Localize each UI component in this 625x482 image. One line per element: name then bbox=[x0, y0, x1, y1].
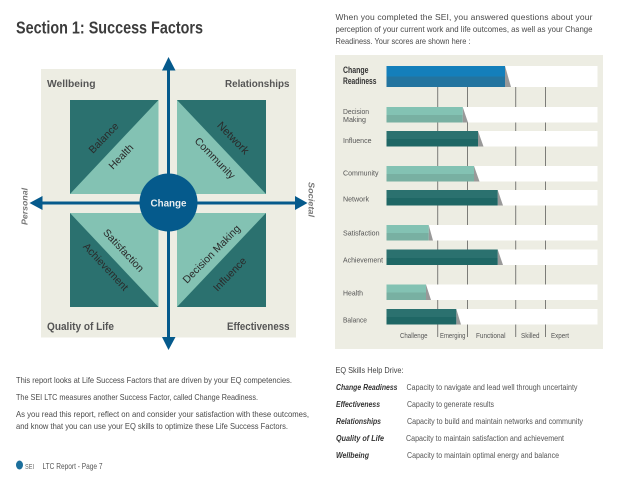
text block: SEI explanation bbox=[336, 12, 593, 46]
chart axis labels: Functional bbox=[476, 333, 506, 340]
row: Change Readiness bbox=[336, 383, 578, 392]
bar: Satisfaction bbox=[343, 225, 598, 240]
text block: SEI explanation: perception of your current work and life outcomes, as well as your Change bbox=[336, 24, 593, 34]
row: Quality of Life bbox=[336, 434, 565, 443]
center circle: Change bbox=[140, 174, 198, 232]
text block: SEI explanation: Readiness. Your scores are shown here : bbox=[336, 36, 470, 46]
chart axis labels: Emerging bbox=[440, 333, 466, 340]
arrow: vertical axis bbox=[162, 57, 176, 350]
bar: Balance bbox=[343, 309, 598, 324]
heading: EQ Skills Help Drive: EQ Skills Help Drive: bbox=[336, 366, 404, 375]
row: Effectiveness bbox=[336, 400, 494, 409]
bar: Network bbox=[343, 190, 598, 206]
bar: Decision Making bbox=[343, 107, 598, 124]
bar: Community bbox=[343, 166, 598, 182]
footer: SEI logo and page number: LTC Report - Page 7 bbox=[42, 462, 103, 471]
bar: Change Readiness bbox=[343, 65, 598, 87]
row: Relationships: Capacity to build and maintain networks and community bbox=[407, 417, 583, 426]
axis label: Societal: Societal bbox=[306, 182, 316, 218]
text block: EQ Skills Help Drive bbox=[336, 366, 583, 460]
bar: Health: Health bbox=[343, 288, 363, 298]
chart background bbox=[335, 55, 603, 349]
block: Balance and Health: Health bbox=[107, 142, 136, 172]
chart axis labels bbox=[400, 333, 569, 340]
text block: report introduction: As you read this report, reflect on and consider your satisfaction with these outcomes, bbox=[16, 409, 309, 419]
block: Network and Community: Network bbox=[214, 120, 251, 157]
arrow: horizontal axis bbox=[30, 196, 308, 210]
block: Balance and Health bbox=[70, 100, 158, 194]
row: Wellbeing bbox=[336, 451, 559, 460]
text block: SEI explanation: When you completed the SEI, you answered questions about your bbox=[336, 12, 593, 22]
title: Section 1: Success Factors bbox=[16, 18, 203, 38]
bar: Decision Making: Making bbox=[343, 115, 366, 124]
row: Quality of Life: Quality of Life bbox=[336, 434, 384, 443]
quadrant label: Effectiveness: Effectiveness bbox=[227, 321, 290, 333]
bar: Change Readiness: Readiness bbox=[343, 76, 376, 86]
chart gridlines bbox=[437, 87, 546, 337]
row: Quality of Life: Capacity to maintain satisfaction and achievement bbox=[406, 434, 565, 443]
bar: Influence: Influence bbox=[343, 136, 372, 145]
bar: Community: Community bbox=[343, 168, 379, 178]
chart axis labels: Challenge bbox=[400, 333, 428, 340]
row: Wellbeing: Capacity to maintain optimal energy and balance bbox=[407, 451, 559, 460]
bar: Network: Network bbox=[343, 194, 369, 204]
bar: Achievement: Achievement bbox=[343, 256, 384, 264]
bar: Decision Making: Decision bbox=[343, 107, 369, 116]
footer: SEI logo and page number: SEI bbox=[25, 464, 34, 471]
quadrant label: Quality of Life: Quality of Life bbox=[47, 321, 114, 333]
chart axis labels: Expert bbox=[551, 333, 569, 340]
row: Change Readiness: Capacity to navigate and lead well through uncertainty bbox=[406, 383, 578, 392]
panel: score bar chart bbox=[335, 55, 603, 349]
row: Relationships: Relationships bbox=[336, 417, 381, 426]
row: Effectiveness: Effectiveness bbox=[336, 400, 380, 409]
bar: Change Readiness: Change bbox=[343, 65, 368, 75]
block: Decision Making and Influence: Decision Making bbox=[181, 223, 243, 286]
quadrant label: Wellbeing: Wellbeing bbox=[47, 79, 96, 90]
quadrant label: Relationships: Relationships bbox=[225, 79, 290, 90]
bar: Influence bbox=[343, 131, 598, 146]
row: Change Readiness: Change Readiness bbox=[336, 383, 398, 392]
axis label: Personal: Personal bbox=[20, 187, 30, 225]
panel: success factors diagram bbox=[20, 57, 316, 350]
diagram background bbox=[41, 69, 296, 338]
block: Decision Making and Influence: Influence bbox=[211, 255, 249, 294]
bar: Satisfaction: Satisfaction bbox=[343, 228, 380, 238]
chart axis labels: Skilled bbox=[521, 333, 540, 340]
bar: Achievement bbox=[343, 250, 598, 265]
block: Network and Community: Community bbox=[192, 135, 238, 182]
block: Satisfaction and Achievement: Satisfaction bbox=[100, 227, 146, 275]
center circle: Change: Change bbox=[150, 198, 187, 210]
block: Network and Community bbox=[177, 100, 266, 194]
bar: Health bbox=[343, 284, 598, 300]
footer: SEI logo and page number bbox=[16, 460, 103, 471]
row: Effectiveness: Capacity to generate results bbox=[407, 400, 494, 409]
block: Satisfaction and Achievement: Achievement bbox=[80, 241, 131, 293]
row: Relationships bbox=[336, 417, 583, 426]
block: Balance and Health: Balance bbox=[87, 120, 122, 156]
block: Decision Making and Influence bbox=[177, 213, 266, 307]
text block: report introduction bbox=[16, 375, 309, 431]
text block: report introduction: This report looks at Life Success Factors that are driven by your EQ competencies. bbox=[16, 375, 292, 385]
row: Wellbeing: Wellbeing bbox=[336, 451, 369, 460]
text block: report introduction: The SEI LTC measures another Success Factor, called Change Readiness. bbox=[16, 392, 258, 402]
block: Satisfaction and Achievement bbox=[70, 213, 158, 307]
bar: Balance: Balance bbox=[343, 316, 367, 324]
icon: SEI logo bbox=[16, 460, 23, 470]
text block: report introduction: and know that you can use your EQ skills to optimize these Life Success Factors. bbox=[16, 421, 288, 431]
